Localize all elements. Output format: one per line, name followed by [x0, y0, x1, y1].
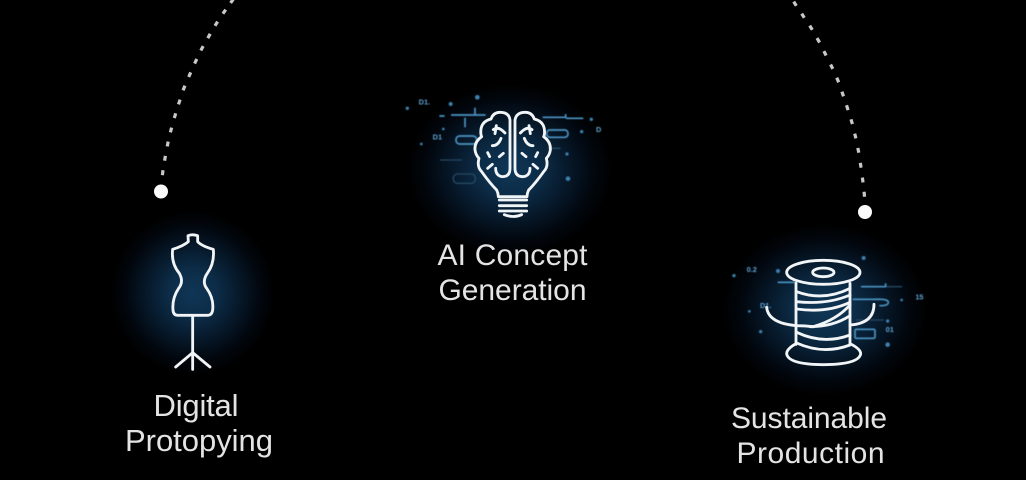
- step: digital prototyping: [111, 211, 275, 458]
- dashed arc: right: [794, 2, 864, 197]
- label: ai concept generation: Generation: [438, 274, 586, 307]
- data traces: spool: 15: [915, 292, 923, 301]
- label: sustainable production: Sustainable: [731, 402, 887, 435]
- label: ai concept generation: AI Concept: [438, 239, 588, 272]
- step: sustainable production: [723, 224, 927, 470]
- data traces: spool: D1.: [760, 301, 771, 310]
- step: ai concept generation: [406, 84, 612, 307]
- icon: thread spool: [767, 260, 874, 365]
- icon glow: mannequin: [111, 211, 275, 375]
- node dot: right: [858, 205, 872, 219]
- data traces: lightbulb: D1: [433, 132, 442, 141]
- label: digital protopying: Protopying: [125, 423, 273, 458]
- label: digital protopying: [125, 388, 273, 458]
- icon glow: spool: [723, 224, 927, 396]
- node dot: left: [154, 184, 168, 198]
- icon: brain lightbulb: [475, 112, 550, 216]
- data traces: spool: 01: [886, 325, 894, 334]
- label: ai concept generation: [438, 239, 588, 307]
- data traces: lightbulb: [406, 95, 601, 183]
- data traces: lightbulb: D: [596, 125, 601, 134]
- label: sustainable production: [731, 402, 887, 470]
- dashed arc: left: [162, 0, 233, 175]
- data traces: lightbulb: D1.: [419, 98, 430, 107]
- icon glow: lightbulb: [408, 84, 612, 256]
- data traces: spool: 0.2: [747, 265, 757, 274]
- label: sustainable production: Production: [736, 437, 884, 470]
- icon: dress form mannequin: [172, 235, 214, 369]
- data traces: spool: [732, 256, 923, 347]
- label: digital protopying: Digital: [154, 388, 238, 423]
